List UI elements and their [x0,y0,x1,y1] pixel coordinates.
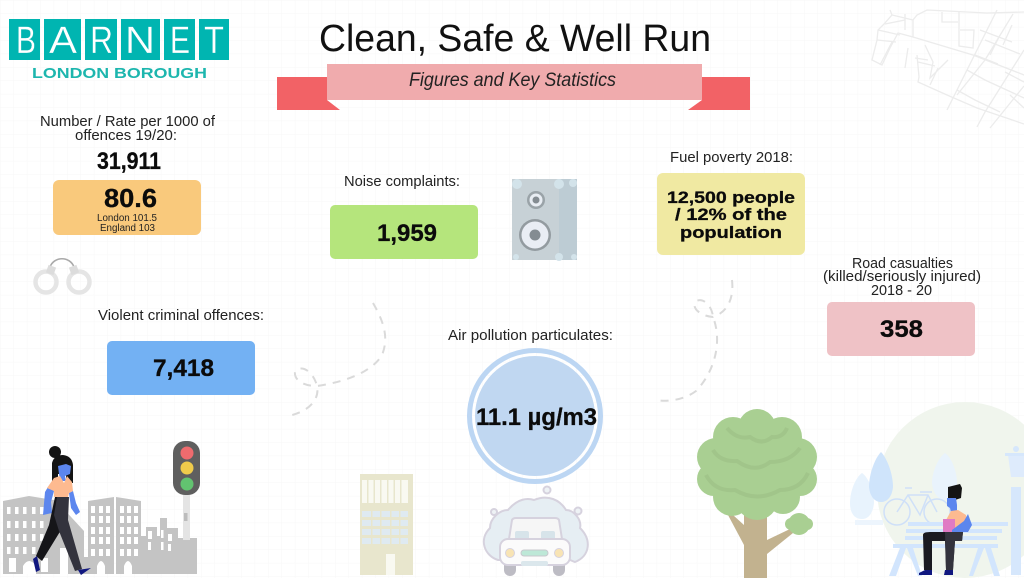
panel: air pollution [448,327,613,482]
panel: air pollution: 11.1 µg/m3 [476,404,597,431]
panel: road casualties: 2018 - 20 [871,282,932,299]
panel: fuel poverty: Fuel poverty 2018: [670,149,793,166]
panel: noise complaints: 1,959 [377,220,437,247]
panel: offences: 80.6 [104,183,157,213]
panel: air pollution: Air pollution particulates: [448,327,613,344]
panel: fuel poverty: population [680,223,782,242]
panel: violent criminal offences: 7,418 [153,355,214,382]
panel: fuel poverty: 12,500 people [667,188,795,207]
illustration: office building [360,474,413,575]
logo: Barnet London Borough: T [204,20,224,62]
street map decoration [872,10,1024,128]
panel: offences: Number / Rate per 1000 of [40,113,216,130]
logo: Barnet London Borough: A [49,20,78,62]
panel: road casualties: (killed/seriously injured) [823,268,981,285]
panel: fuel poverty: / 12% of the [675,205,787,224]
logo: Barnet London Borough: E [170,20,190,62]
panel: offences [40,113,216,235]
panel: offences: 31,911 [97,148,161,175]
panel: offences: offences 19/20: [75,127,177,144]
illustration: tree [697,409,817,578]
logo: Barnet London Borough: N [125,20,155,62]
illustration: walking woman [33,446,91,575]
icon: traffic light [173,441,200,540]
dashed path left [288,303,385,416]
logo: Barnet London Borough [9,19,229,82]
panel: fuel poverty [657,149,805,255]
panel: road casualties: Road casualties [852,255,953,272]
icon: speaker [512,179,577,261]
ribbon banner: Figures and Key Statistics [409,70,616,91]
ribbon banner [277,64,750,110]
panel: road casualties [823,255,981,356]
panel: violent criminal offences: Violent criminal offences: [98,307,264,324]
panel: offences: London 101.5 [97,213,157,224]
logo: Barnet London Borough: R [90,20,113,62]
icon: handcuffs [36,259,90,292]
illustration: park bench scene [850,402,1024,578]
panel: offences: England 103 [100,223,155,234]
panel: noise complaints [330,173,478,259]
panel: road casualties: 358 [880,316,923,343]
panel: noise complaints: Noise complaints: [344,173,460,190]
illustration: city buildings [3,496,197,574]
panel: violent criminal offences [98,307,264,395]
title: Clean, Safe & Well Run [319,18,711,60]
logo: Barnet London Borough: LONDON BOROUGH [32,65,207,82]
dashed path right [655,280,732,401]
icon: polluting car [484,486,588,576]
logo: Barnet London Borough: B [16,20,36,62]
